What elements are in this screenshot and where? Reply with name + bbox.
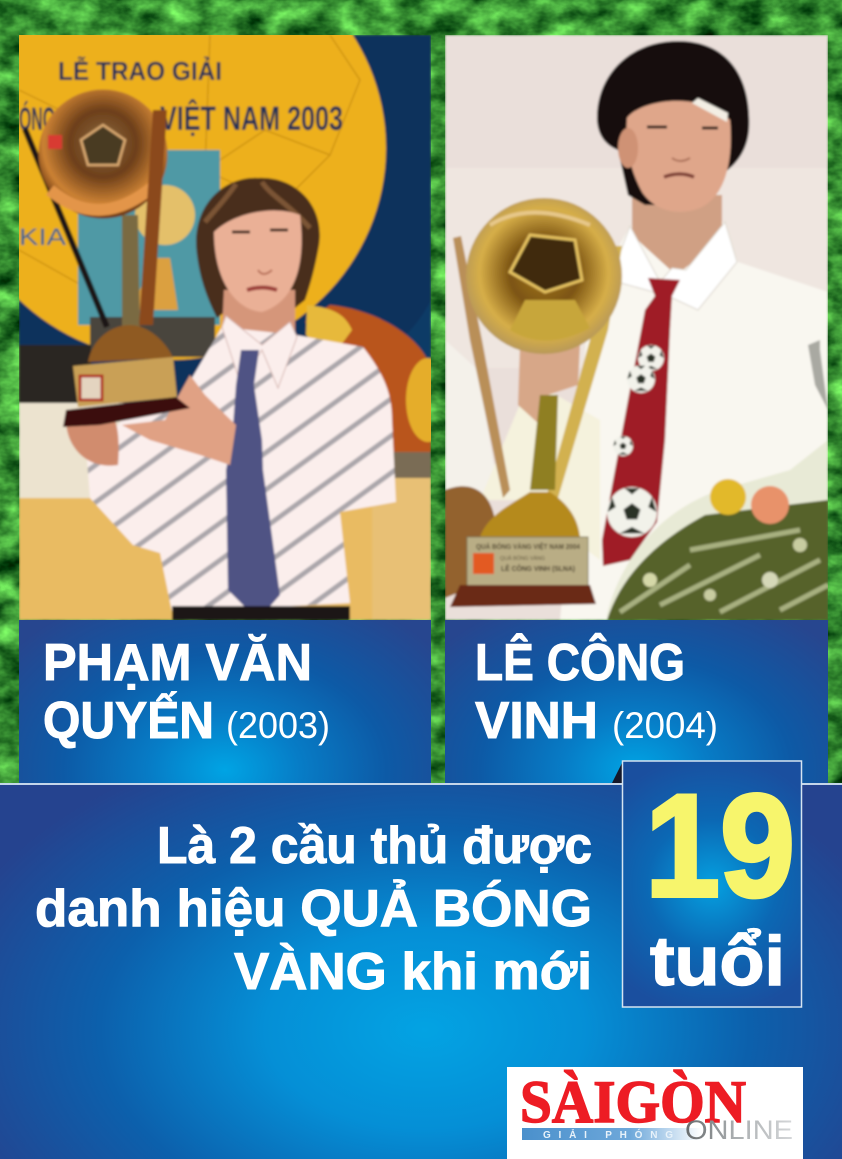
photo: Phạm Văn Quyến holding the trophy: ÓNG [19,101,55,137]
man: neck and face [221,288,298,334]
player: face [627,101,731,212]
trophy: struts [25,129,107,327]
logo bar [522,1128,702,1140]
main panel [0,783,842,1159]
logo wordmark: SÀIGÒN [520,1069,746,1135]
trophy: base and plaque [88,325,173,362]
player: collar [610,222,737,310]
name panel: Phạm Văn Quyến (2003) [19,620,431,784]
age callout: 19 tuổi [622,761,802,1007]
man: striped shirt [87,327,396,612]
player: arm [445,486,495,598]
silver cup at right [808,340,828,410]
photo: Lê Công Vinh holding the trophy [445,35,828,620]
man: hair [196,178,320,318]
statement text: danh hiệu QUẢ BÓNG [35,879,592,938]
player: hair [597,41,749,205]
stage: yellow ball backdrop [19,35,388,362]
statement text: Là 2 cầu thủ được [157,817,592,875]
stage and floor [19,345,91,405]
trophy: golden ball [466,198,622,354]
backdrop text: LỄ TRAO GIẢI [58,56,222,86]
photo: Lê Công Vinh holding the trophy: LÊ CÔNG VINH (SLNA) [501,564,575,573]
year 2004: (2004) [612,705,718,746]
word tuổi: tuổi [650,922,785,1000]
photo: Phạm Văn Quyến holding the trophy: VIỆT NAM 2003 [160,100,343,138]
photo: Phạm Văn Quyến holding the trophy: KIA [19,224,66,251]
trophy: struts [453,236,510,498]
trophy: hand and stem [518,345,580,425]
man: tie [226,350,280,620]
logo online: ONLINE [685,1115,793,1145]
photo: Lê Công Vinh holding the trophy: QUẢ BÓNG VÀNG [500,555,545,562]
statement text: VÀNG khi mới [234,943,592,1001]
number 19: 19 [645,764,795,927]
player: white shirt [560,222,828,620]
player: bandage [692,98,728,122]
photo: Phạm Văn Quyến holding the trophy [19,35,431,620]
name line 1: LÊ CÔNG [475,633,685,692]
statement text [35,817,592,1001]
teal banner [78,150,220,325]
man: hands [66,412,119,466]
logo: Sài Gòn Giải Phóng Online [507,1067,803,1159]
trophy: base [480,492,580,537]
name line 2: QUYẾN [43,691,214,750]
name line 2: VINH [475,692,598,750]
player: neck [632,195,722,275]
name panel: Lê Công Vinh (2004) [445,620,828,784]
bouquet [607,440,828,620]
logo subtitle: GIẢI PHÓNG [543,1128,673,1141]
photo: Lê Công Vinh holding the trophy: QUẢ BÓNG VÀNG VIỆT NAM 2004 [476,542,580,551]
trophy: plaque [467,537,588,587]
man: collar [222,316,297,388]
name line 1: PHẠM VĂN [43,634,312,692]
year 2003: (2003) [226,705,330,746]
trophy: golden ball [38,90,168,218]
tie: soccer balls [638,345,664,371]
player: red tie [602,278,680,566]
